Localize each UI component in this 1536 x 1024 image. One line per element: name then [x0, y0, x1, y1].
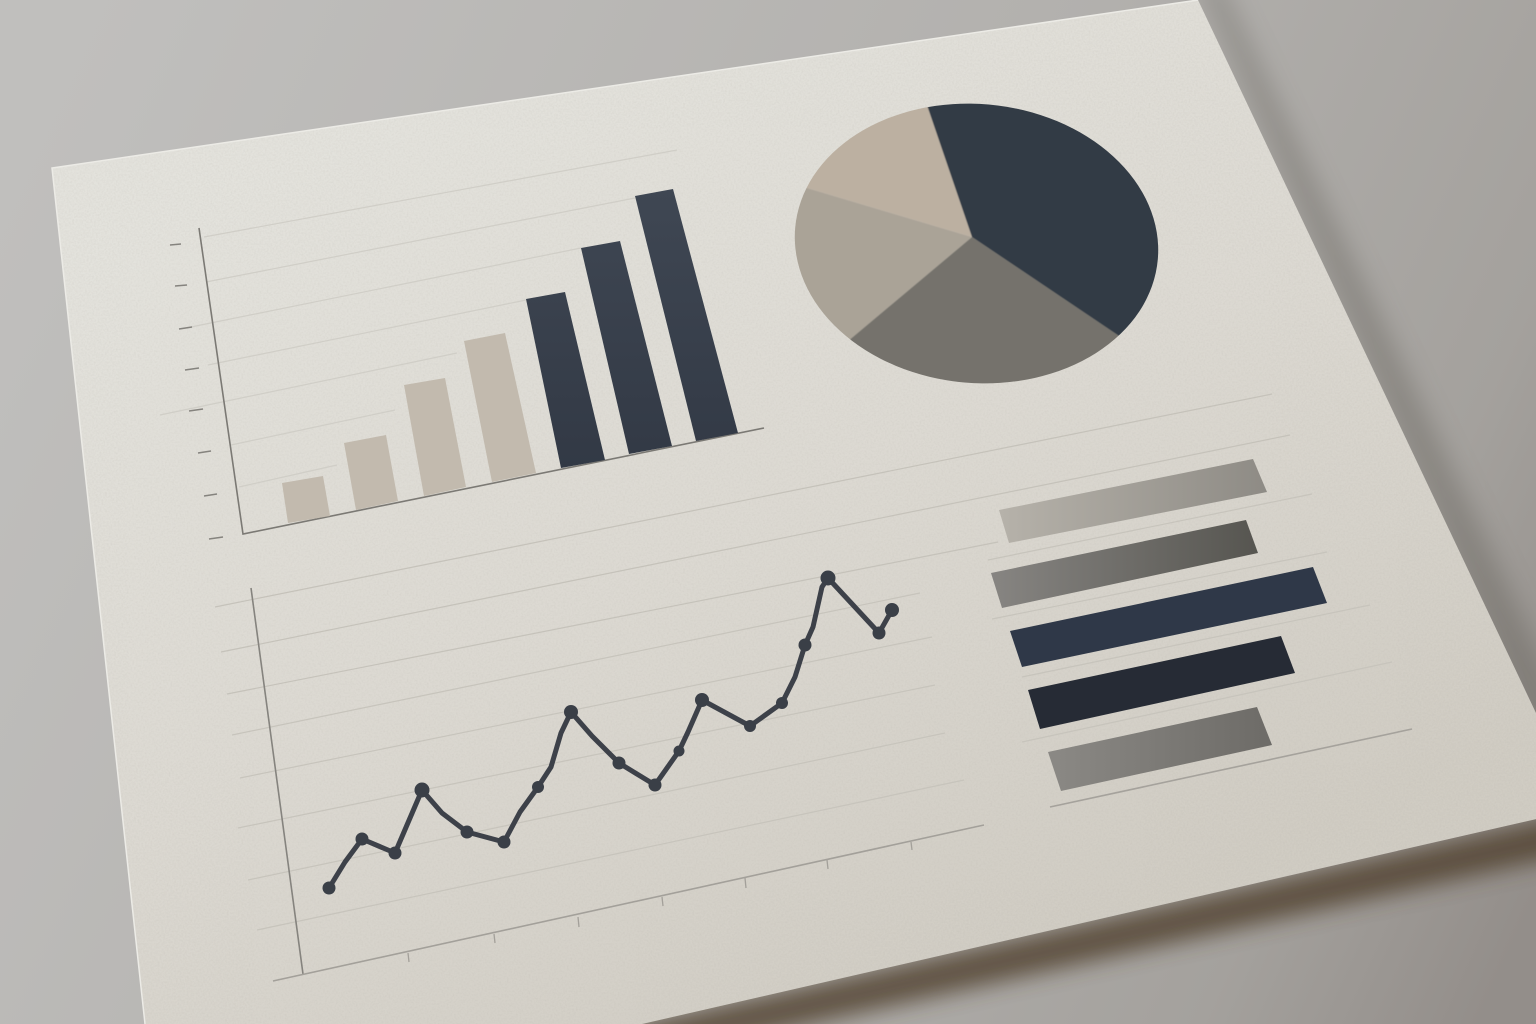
panel: line chart: [232, 570, 984, 981]
paper edge highlight: [52, 0, 1198, 1024]
bar chart axes: [199, 228, 764, 534]
panel: horizontal bars: [988, 459, 1412, 807]
pie slice: taupe: [794, 188, 972, 340]
line chart x axis: [273, 825, 984, 981]
horizontal bar 3: [1010, 567, 1327, 667]
horizontal bar 2: [991, 520, 1258, 608]
pie slice: navy: [927, 104, 1158, 336]
line chart y axis: [251, 588, 303, 974]
line chart gridlines: [232, 593, 964, 930]
pie slice: gray: [850, 236, 1119, 384]
dark bars: [526, 189, 738, 468]
data points: [322, 570, 899, 894]
horizontal bar guide lines: [988, 494, 1392, 742]
paper grain texture: [86, 48, 1157, 419]
horizontal bar 4: [1028, 636, 1295, 729]
line chart x axis ticks: [408, 842, 912, 962]
long lines between upper and lower charts: [215, 394, 1290, 694]
panel: pie chart: [794, 104, 1158, 384]
data line: [329, 578, 892, 888]
bar chart gridlines: [160, 150, 677, 487]
horizontal bar 1: [999, 459, 1267, 543]
bar chart y axis ticks: [170, 244, 223, 539]
paper side shadow: [1198, 0, 1536, 800]
panel: bar chart: [160, 150, 764, 539]
horizontal bar 5: [1048, 707, 1272, 791]
horizontal bar baseline: [1050, 729, 1412, 807]
light bars: [282, 333, 536, 523]
pie slice: beige: [806, 107, 972, 237]
paper bottom shadow: [620, 812, 1536, 1024]
